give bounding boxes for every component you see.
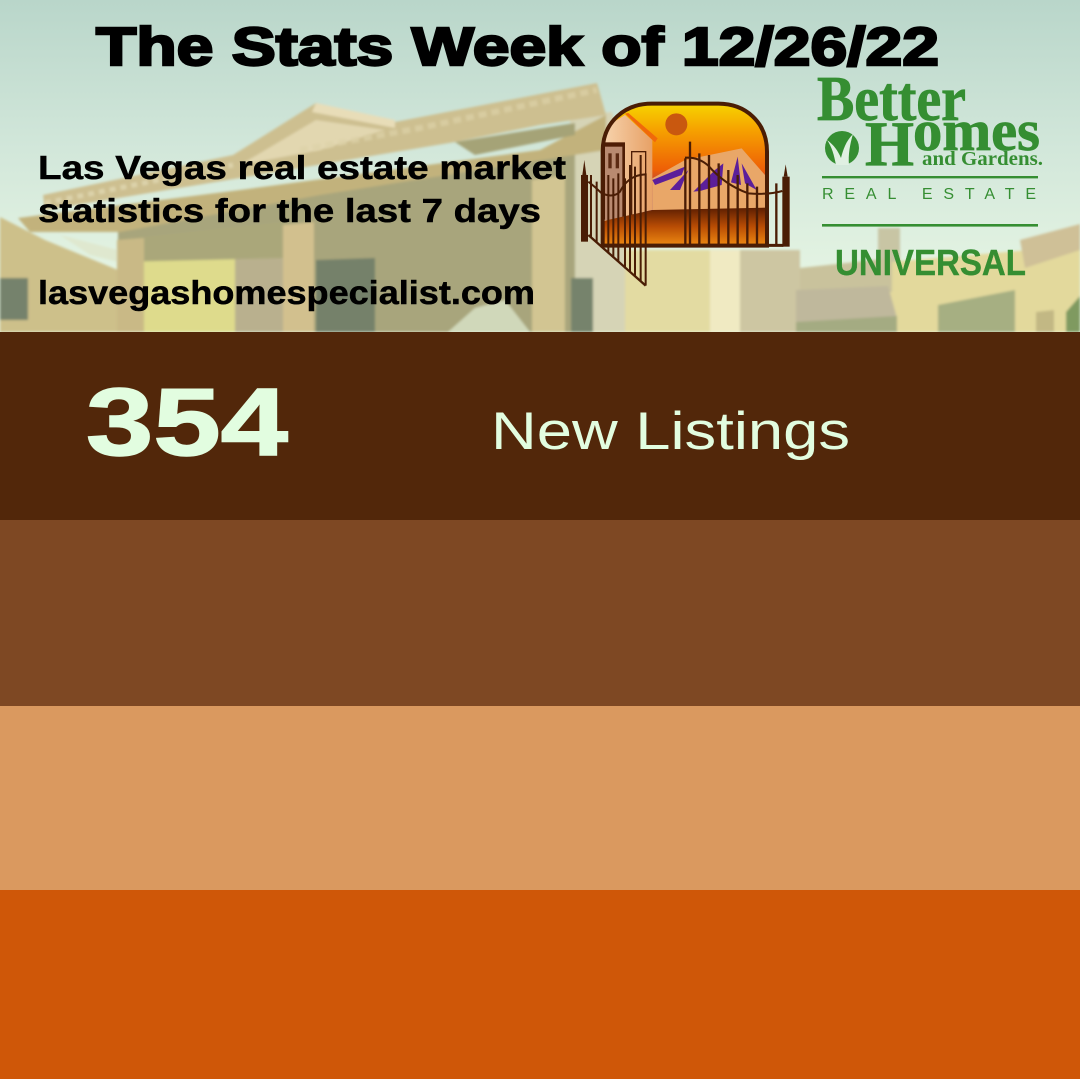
icon: leaf circle bbox=[825, 131, 859, 165]
gate posts bbox=[581, 175, 588, 242]
beam and eaves bbox=[18, 115, 606, 232]
door bbox=[603, 142, 625, 220]
logo: Better Homes and Gardens Real Estate: omes bbox=[913, 98, 1040, 163]
stat label: New Listings bbox=[491, 402, 850, 461]
subtitle bbox=[38, 149, 566, 229]
tower behind gate bbox=[570, 112, 630, 332]
band: empty brown bbox=[0, 520, 1080, 706]
stat number: 354 bbox=[86, 369, 288, 476]
universal: UNIVERSAL bbox=[835, 242, 1026, 283]
title: The Stats Week of 12/26/22 bbox=[96, 17, 939, 77]
right gate bbox=[685, 158, 782, 194]
mountain bbox=[652, 148, 765, 210]
floor bbox=[603, 208, 767, 246]
sun bbox=[665, 113, 687, 135]
logo: Better Homes and Gardens Real Estate bbox=[817, 64, 1043, 283]
logo: Better Homes and Gardens Real Estate: and Gardens. bbox=[922, 148, 1043, 170]
house wall bbox=[603, 115, 652, 221]
website: lasvegashomespecialist.com bbox=[38, 274, 535, 311]
plant bbox=[448, 300, 530, 332]
subtitle: Las Vegas real estate market bbox=[38, 149, 566, 186]
real estate: REAL ESTATE bbox=[822, 186, 1036, 203]
logo: Better Homes and Gardens Real Estate: H bbox=[865, 108, 914, 179]
band: empty tan bbox=[0, 706, 1080, 890]
roof tiles bbox=[45, 90, 597, 203]
wordmark: Better bbox=[817, 64, 966, 134]
left gate bbox=[588, 174, 646, 195]
background photo: house bbox=[0, 0, 1080, 332]
right side: walls and roofs bbox=[625, 250, 740, 332]
band: empty orange bbox=[0, 890, 1080, 1079]
subtitle: statistics for the last 7 days bbox=[38, 192, 541, 229]
wall and opening bbox=[118, 150, 575, 332]
icon: gate logo bbox=[581, 102, 790, 286]
left bushes bbox=[0, 217, 125, 332]
band: new listings bbox=[0, 332, 1080, 520]
